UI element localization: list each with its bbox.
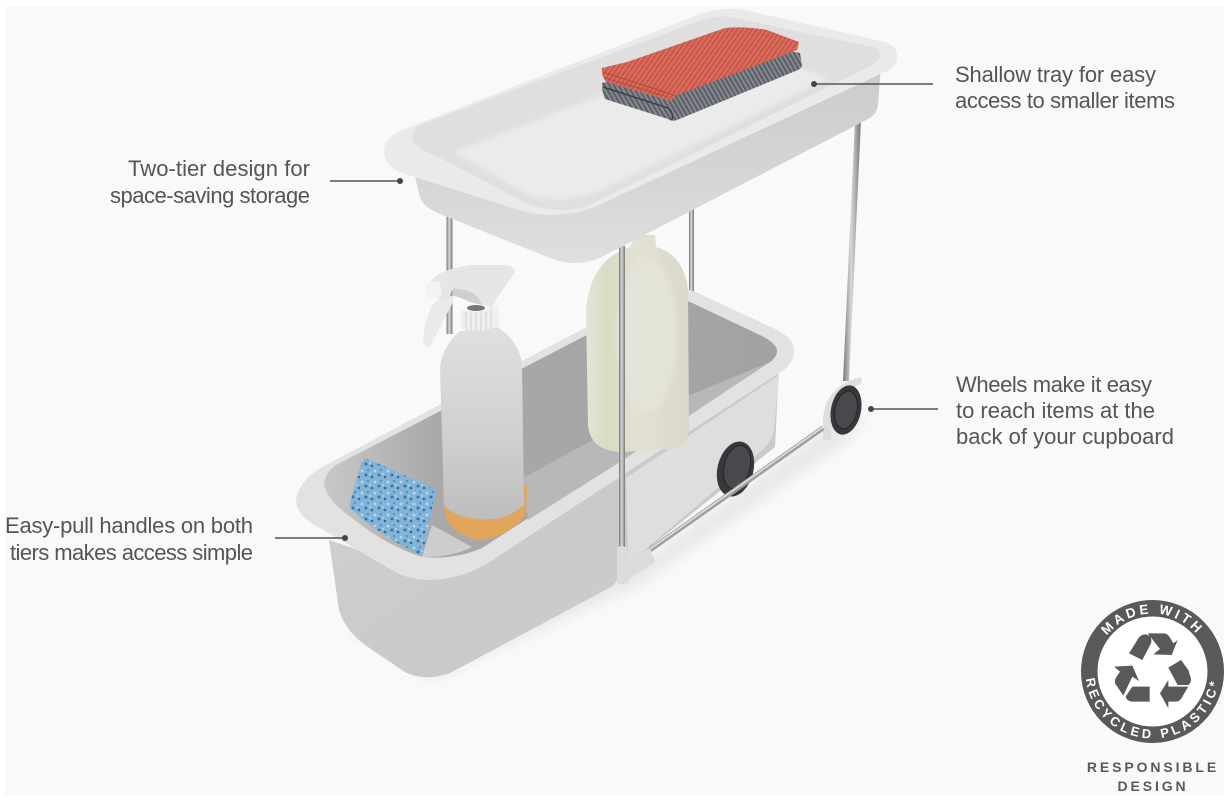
floor shadow (345, 410, 870, 680)
icon: recycling arrows (1114, 633, 1191, 708)
bottle collar (461, 305, 499, 331)
front pole and foot (617, 246, 655, 584)
callout: shallow tray: access to smaller items (955, 88, 1175, 113)
callout: two-tier design: space-saving storage (110, 183, 310, 208)
tray towels (602, 27, 802, 121)
badge ring text: MADE WITH (1100, 604, 1202, 635)
bottle base (442, 485, 527, 540)
bin floor (523, 362, 770, 520)
label: responsible design: RESPONSIBLE (1087, 759, 1219, 775)
bottle label recess (617, 257, 677, 413)
tray body (414, 65, 881, 263)
callout: wheels: back of your cupboard (956, 424, 1174, 449)
sponge (350, 458, 435, 555)
callout: shallow tray: Shallow tray for easy (955, 62, 1156, 87)
grey towel (602, 45, 802, 121)
bin outer body (329, 365, 779, 677)
callout: easy-pull handles (5, 513, 348, 565)
bottle body (440, 327, 524, 519)
red towel (602, 27, 799, 101)
spray trigger (423, 265, 515, 347)
label: responsible design (1087, 759, 1219, 794)
callout: wheels: Wheels make it easy (956, 372, 1152, 397)
callout: shallow tray (811, 62, 1175, 113)
back poles (446, 208, 694, 334)
base rod (650, 428, 823, 550)
lower bin (296, 287, 794, 677)
callout: easy-pull handles: Easy-pull handles on both (5, 513, 253, 538)
rear wheel and strut (823, 377, 866, 440)
badge: made with recycled plastic (1081, 600, 1224, 743)
callout: wheels (868, 372, 1174, 449)
callout: two-tier design (110, 156, 403, 208)
bin inner well (324, 296, 777, 558)
callout: easy-pull handles: tiers makes access simple (10, 540, 253, 565)
callout: two-tier design: Two-tier design for (128, 156, 310, 181)
badge ring text: RECYCLED PLASTIC* (1086, 678, 1216, 738)
milk bottle (586, 235, 689, 452)
tray rim (384, 9, 897, 215)
rear right pole (843, 120, 861, 381)
storage unit illustration (296, 9, 897, 677)
front wheel (711, 437, 760, 501)
callout: wheels: to reach items at the (956, 398, 1155, 423)
tray well (412, 16, 880, 210)
spray bottle (423, 265, 527, 540)
badge ring text (1086, 604, 1216, 738)
bin rim (296, 287, 794, 580)
top tray (384, 9, 897, 263)
bin divider (422, 525, 472, 557)
tray floor (454, 68, 828, 199)
label: responsible design: DESIGN (1117, 778, 1189, 794)
